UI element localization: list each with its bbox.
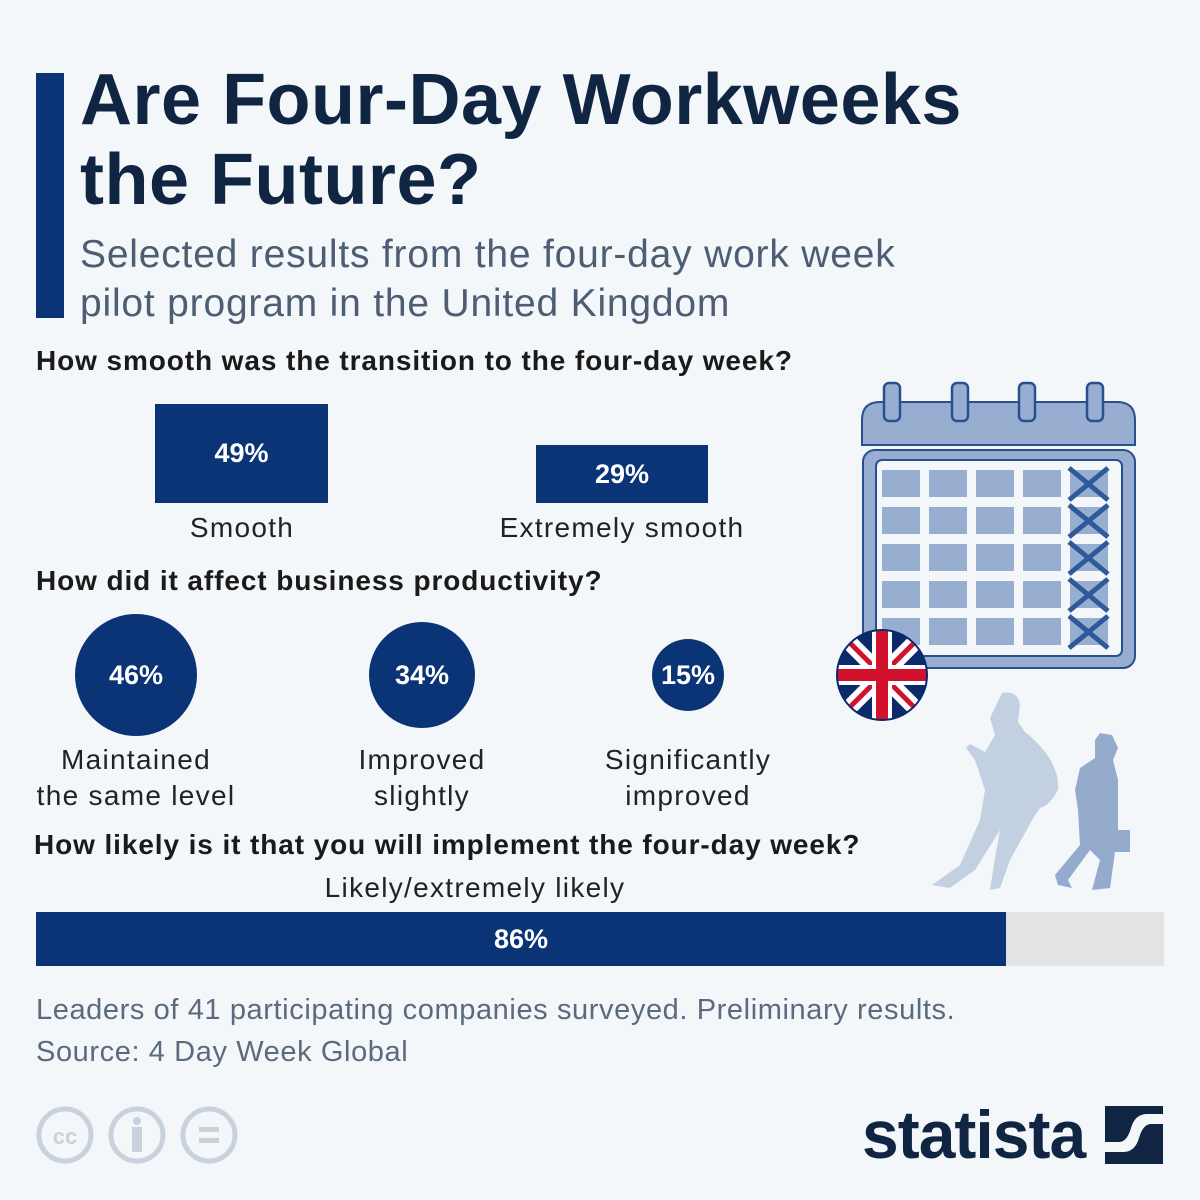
circle: maintained (37, 614, 235, 811)
footer notes (36, 994, 955, 1068)
question 1: How smooth was the transition to the four-day week? (36, 345, 793, 376)
title: Are Four-Day Workweeks (80, 60, 962, 140)
accent bar (36, 73, 64, 318)
people silhouettes (932, 692, 1130, 890)
circle: maintained: 46% (109, 660, 163, 690)
bar: extremely smooth: 29% (595, 458, 649, 488)
icons: creative commons (36, 1106, 238, 1164)
subtitle (80, 233, 896, 325)
title (80, 60, 962, 220)
statista logo: statista (862, 1097, 1085, 1173)
circle: significantly improved: 15% (661, 660, 715, 690)
progress bar: 86% (494, 924, 548, 954)
calendar icon (861, 382, 1136, 669)
subtitle: Selected results from the four-day work week (80, 233, 896, 276)
circle: improved slightly: Improved (358, 744, 486, 775)
title: the Future? (80, 140, 481, 220)
circle: improved slightly (358, 622, 486, 811)
circle: significantly improved: improved (625, 780, 751, 811)
progress bar: Likely/extremely likely (325, 872, 625, 903)
footer notes: Source: 4 Day Week Global (36, 1036, 408, 1068)
question 2: How did it affect business productivity? (36, 565, 602, 596)
circle: improved slightly: 34% (395, 660, 449, 690)
footer notes: Leaders of 41 participating companies surveyed. Preliminary results. (36, 994, 955, 1026)
icon: UK flag (836, 629, 928, 721)
bar: smooth: Smooth (190, 512, 294, 543)
circle: significantly improved: Significantly (605, 744, 771, 775)
progress bar (36, 872, 1164, 966)
circle: maintained: Maintained (61, 744, 211, 775)
circle: significantly improved (605, 639, 771, 811)
icons: creative commons: cc (53, 1124, 77, 1149)
subtitle: pilot program in the United Kingdom (80, 282, 730, 325)
circle: improved slightly: slightly (374, 780, 470, 811)
bar: smooth: 49% (214, 438, 269, 468)
bar: extremely smooth (500, 445, 744, 543)
circle: maintained: the same level (37, 780, 235, 811)
question 3: How likely is it that you will implement the four-day week? (34, 829, 860, 860)
bar: extremely smooth: Extremely smooth (500, 512, 744, 543)
bar: smooth (155, 404, 328, 543)
